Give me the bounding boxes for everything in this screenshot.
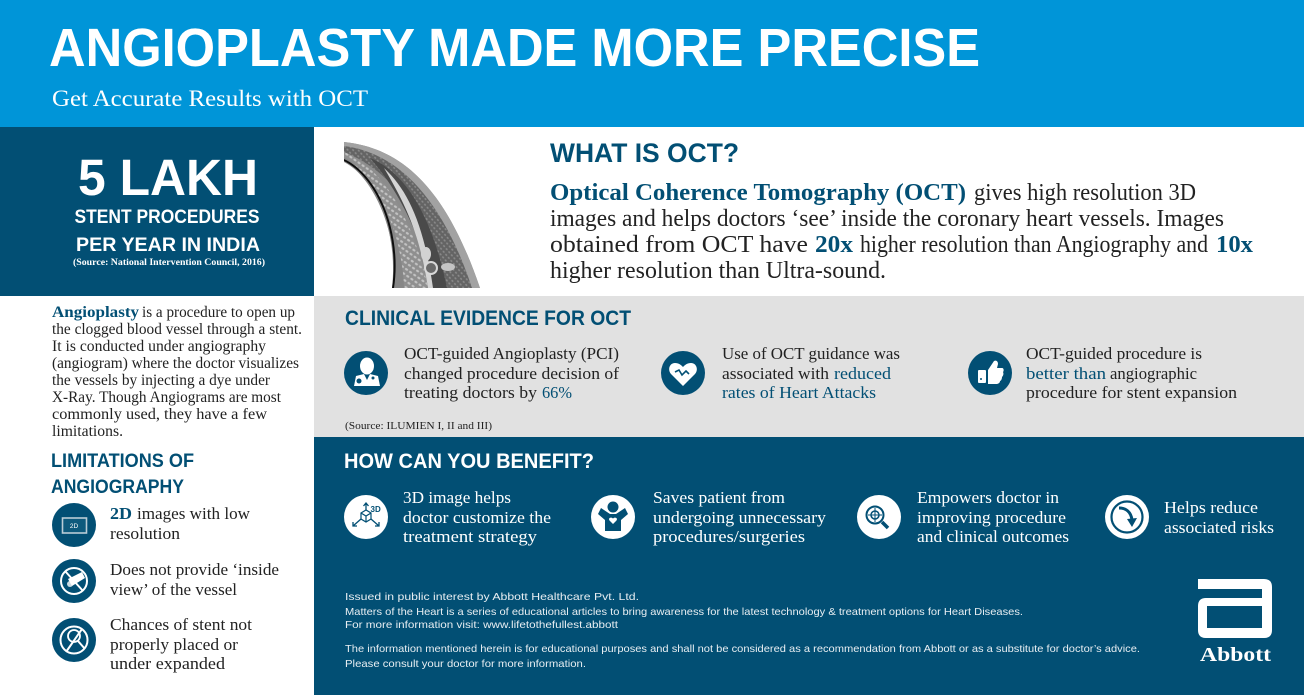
- heading: CLINICAL EVIDENCE FOR OCT: [345, 307, 631, 330]
- icon: no inside view: [52, 559, 96, 603]
- limitation: 2D images: 2D: [110, 504, 132, 523]
- evidence: stent expansion: procedure for stent expansion: [1026, 383, 1238, 402]
- limitation: inside view: Does not provide ‘inside: [110, 560, 279, 579]
- panel: angioplasty description: the clogged blood vessel through a stent.: [52, 321, 302, 338]
- icon: thumbs up: [968, 351, 1012, 395]
- icon: 2D screen: 2D: [70, 523, 78, 530]
- evidence: decision change: [404, 344, 619, 402]
- heading: [51, 451, 194, 498]
- heading: LIMITATIONS OF: [51, 451, 194, 472]
- benefit: empowers doctor: improving procedure: [917, 508, 1066, 527]
- benefit: 3D image: doctor customize the: [403, 508, 551, 527]
- evidence: stent expansion: [1026, 344, 1238, 402]
- evidence: decision change: OCT-guided Angioplasty (PCI): [404, 344, 619, 363]
- evidence: decision change: 66%: [542, 383, 572, 402]
- limitation: stent placement: properly placed or: [110, 635, 238, 654]
- panel: angioplasty description: X-Ray. Though Angiograms are most: [52, 389, 282, 406]
- evidence: heart attacks: [722, 344, 900, 402]
- footer disclaimer: Issued in public interest by Abbott Healthcare Pvt. Ltd.: [345, 591, 639, 603]
- image: vessel cross-section: [344, 142, 480, 288]
- panel: 5 lakh statistic: PER YEAR IN INDIA: [76, 235, 260, 256]
- limitation: stent placement: Chances of stent not: [110, 615, 252, 634]
- icon: stent not placed: [52, 618, 96, 662]
- evidence: heart attacks: rates of Heart Attacks: [722, 383, 876, 402]
- source note: (Source: ILUMIEN I, II and III): [345, 420, 492, 432]
- benefit: 3D image: treatment strategy: [403, 527, 538, 546]
- icon: 3D cube: 3D: [370, 505, 381, 514]
- footer disclaimer: For more information visit: www.lifetothefullest.abbott: [345, 619, 618, 631]
- subtitle: Get Accurate Results with OCT: [52, 86, 368, 111]
- icon: heart: [661, 351, 705, 395]
- benefit: reduce risks: Helps reduce: [1164, 498, 1258, 517]
- title: ANGIOPLASTY MADE MORE PRECISE: [49, 18, 980, 78]
- icon: 3D cube: [344, 495, 388, 539]
- benefit: reduce risks: [1164, 498, 1274, 537]
- description text: 10x: [1216, 232, 1253, 258]
- evidence: heart attacks: associated with: [722, 364, 830, 383]
- limitation: stent placement: [110, 615, 252, 673]
- benefit: empowers doctor: [917, 488, 1069, 546]
- panel: what is OCT: [314, 127, 1304, 296]
- limitation: inside view: [110, 560, 279, 599]
- footer disclaimer: Please consult your doctor for more information.: [345, 658, 586, 670]
- icon: 2D screen: [52, 503, 96, 547]
- description text: [550, 180, 1253, 284]
- icon: patient with heart: [591, 495, 635, 539]
- benefit: saves patient: Saves patient from: [653, 488, 785, 507]
- limitation: 2D images: [110, 504, 251, 543]
- benefit: saves patient: procedures/surgeries: [653, 527, 805, 546]
- benefit: empowers doctor: and clinical outcomes: [917, 527, 1069, 546]
- benefit: saves patient: undergoing unnecessary: [653, 508, 827, 527]
- panel: angioplasty description: is a procedure to open up: [142, 304, 295, 321]
- limitation: 2D images: resolution: [110, 524, 181, 543]
- footer disclaimer: Matters of the Heart is a series of educational articles to bring awareness for the latest technology & treatment options for Heart Diseases.: [345, 606, 1023, 618]
- icon: magnifier target: [857, 495, 901, 539]
- icon: downward risk arrow: [1105, 495, 1149, 539]
- description text: higher resolution than Angiography and: [860, 232, 1208, 258]
- limitation: stent placement: under expanded: [110, 654, 226, 673]
- panel: 5 lakh statistic: STENT PROCEDURES: [74, 207, 260, 228]
- benefit: reduce risks: associated risks: [1164, 518, 1274, 537]
- limitation: 2D images: images with low: [137, 504, 251, 523]
- evidence: stent expansion: angiographic: [1110, 364, 1197, 383]
- description text: gives high resolution 3D: [974, 180, 1196, 206]
- benefit: 3D image: [403, 488, 551, 546]
- evidence: heart attacks: reduced: [834, 364, 892, 383]
- panel: limitations of angiography: [51, 451, 279, 673]
- heading: HOW CAN YOU BENEFIT?: [344, 450, 594, 473]
- evidence: stent expansion: better than: [1026, 364, 1107, 383]
- footer disclaimer: [345, 591, 1140, 670]
- panel: angioplasty description: (angiogram) where the doctor visualizes: [52, 355, 299, 372]
- panel: angioplasty description: commonly used, they have a few: [52, 406, 268, 423]
- description text: obtained from OCT have: [550, 232, 808, 258]
- panel: clinical evidence: [314, 296, 1304, 437]
- description text: images and helps doctors ‘see’ inside the coronary heart vessels. Images: [550, 206, 1224, 232]
- evidence: decision change: treating doctors by: [404, 383, 538, 402]
- benefit: saves patient: [653, 488, 827, 546]
- evidence: heart attacks: Use of OCT guidance was: [722, 344, 900, 363]
- panel: how can you benefit: [314, 437, 1304, 695]
- heading: ANGIOGRAPHY: [51, 477, 184, 498]
- panel: 5 lakh statistic: 5 LAKH: [78, 149, 258, 206]
- panel: angioplasty description: the vessels by injecting a dye under: [52, 372, 271, 389]
- description text: higher resolution than Ultra-sound.: [550, 258, 886, 284]
- benefit: 3D image: 3D image helps: [403, 488, 511, 507]
- heading: WHAT IS OCT?: [550, 138, 739, 168]
- evidence: stent expansion: OCT-guided procedure is: [1026, 344, 1202, 363]
- logo: Abbott: [1198, 579, 1272, 666]
- limitation: inside view: view’ of the vessel: [110, 580, 237, 599]
- logo: Abbott: Abbott: [1200, 644, 1271, 666]
- panel: angioplasty description: Angioplasty: [52, 304, 139, 321]
- panel: angioplasty description: It is conducted under angiography: [52, 338, 266, 355]
- footer disclaimer: The information mentioned herein is for educational purposes and shall not be considered as a recommendation from Abbott or as a substitute for doctor’s advice.: [345, 643, 1140, 655]
- panel: angioplasty description: [52, 304, 302, 440]
- panel: angioplasty description: limitations.: [52, 423, 123, 440]
- header banner: [0, 0, 1304, 127]
- evidence: decision change: changed procedure decision of: [404, 364, 619, 383]
- panel: 5 lakh statistic: [0, 127, 314, 296]
- icon: doctor: [344, 351, 388, 395]
- benefit: empowers doctor: Empowers doctor in: [917, 488, 1060, 507]
- description text: Optical Coherence Tomography (OCT): [550, 180, 966, 206]
- panel: 5 lakh statistic: (Source: National Intervention Council, 2016): [73, 257, 265, 268]
- description text: 20x: [815, 232, 853, 258]
